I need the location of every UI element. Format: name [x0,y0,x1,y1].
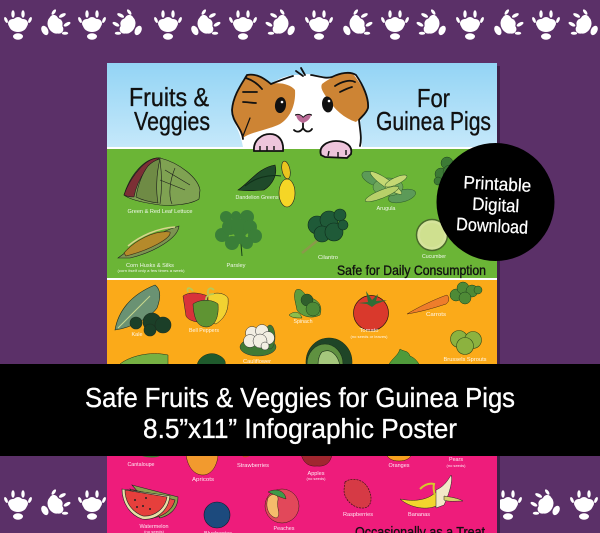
label: cauliflower: Cauliflower [243,359,271,365]
badge: printable digital download: Download [456,214,529,238]
label: carrots: Carrots [426,312,446,318]
label: tomato: Tomato [360,328,378,334]
icon: carrot [407,282,482,314]
icon: raspberry [344,479,371,508]
label: lettuce: Green & Red Leaf Lettuce [128,209,192,215]
label: cantaloupe: Cantaloupe [128,462,154,468]
panel: header [107,63,497,147]
label: apples: Apples [308,471,325,477]
panel: safe for daily consumption [107,149,497,278]
icon: strawberry sliver [241,454,252,457]
label: kale: Kale [132,332,142,338]
icon: cucumber [416,220,448,250]
heading: for guinea pigs [376,83,491,136]
icon: cilantro [302,209,348,253]
heading: safe for daily consumption: Safe for Daily Consumption [337,262,486,278]
label: tomato [350,328,388,339]
label: watermelon: Watermelon [140,524,168,530]
icon: bell peppers [183,288,228,327]
bottom paw print border [3,485,599,525]
heading: fruits and veggies: Fruits & [129,82,209,112]
label: brussels sprouts: Brussels Sprouts [444,357,487,363]
label: tomato: (no seeds or leaves) [350,335,388,339]
top paw print border [3,5,600,45]
icon: blueberry [204,502,230,528]
panel: pink fruits [107,440,497,533]
icon: watermelon [122,485,178,519]
icon: guinea pig [232,68,368,158]
icon: parsley [215,210,262,256]
poster shadow [110,66,500,533]
label: corn husks and silks: Corn Husks & Silks [126,263,174,269]
label: arugula: Arugula [376,206,396,212]
white divider lines [107,147,497,280]
icon: cabbage [306,338,352,386]
icon: arugula [360,168,417,205]
label: corn husks and silks: (corn itself only a few times a week) [118,269,184,273]
badge: printable digital download [436,143,554,261]
poster [107,63,497,533]
icon: kale [115,285,171,336]
icon: apple [301,454,332,466]
icon: herb leaf [388,349,420,366]
label: cilantro: Cilantro [318,255,338,261]
label: parsley: Parsley [226,263,246,269]
badge: printable digital download: Digital [472,194,520,216]
icon: brussels sprouts [450,330,482,354]
label: watermelon [140,524,168,533]
icon: peach [265,489,299,523]
label: oranges: Oranges [388,463,410,469]
icon: cauliflower [240,324,276,356]
label: apples [306,471,326,481]
badge: printable digital download: Printable [463,172,532,196]
banner title line 2: 8.5”x11” Infographic Poster [143,413,457,444]
black title banner [0,364,600,456]
icon: cantaloupe sliver [142,454,160,458]
icon: dandelion greens [238,160,295,207]
label: peaches: Peaches [274,526,295,532]
label: pears: Pears [449,457,463,463]
icon: banana [400,475,463,508]
icon: corn [118,226,179,258]
label: pears: (no seeds) [446,464,466,468]
icon: spinach [289,289,321,318]
label: bananas: Bananas [408,512,430,518]
icon: apricot [186,454,218,475]
label: corn husks and silks [118,263,184,273]
panel: orange veggies [107,280,497,440]
icon: tomato [354,291,388,330]
label: strawberries: Strawberries [237,463,269,469]
icon: broccoli [197,354,225,366]
label: dandelion greens: Dandelion Greens [236,195,279,201]
heading: fruits and veggies [129,82,210,136]
label: pears [446,457,466,468]
icon: romaine lettuce [120,354,168,366]
icon: kale behind badge [434,157,457,185]
icon: orange [386,454,412,461]
banner title line 1: Safe Fruits & Veggies for Guinea Pigs [85,382,515,413]
label: raspberries: Raspberries [343,512,373,518]
heading: fruits and veggies: Veggies [134,106,210,136]
icon: lettuce [124,158,200,205]
label: spinach: Spinach [294,319,312,325]
heading: for guinea pigs: For [417,83,450,113]
label: apples: (no seeds) [306,477,326,481]
label: cucumber: Cucumber [422,254,446,260]
label: bell peppers: Bell Peppers [189,328,219,334]
label: apricots: Apricots [192,477,214,483]
heading: for guinea pigs: Guinea Pigs [376,106,491,136]
